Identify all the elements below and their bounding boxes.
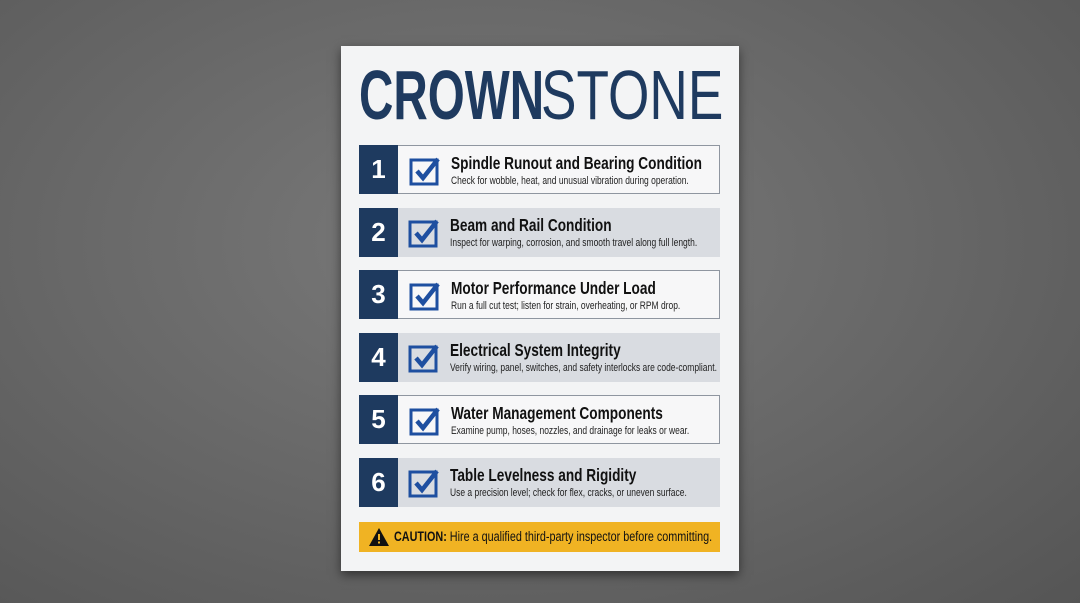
title: CROWN — [359, 56, 544, 134]
title — [359, 56, 723, 134]
caution bar: CAUTION: Hire a qualified third-party inspector before committing. — [394, 529, 712, 544]
item 2 — [359, 208, 720, 257]
item 1: Check for wobble, heat, and unusual vibration during operation. — [451, 175, 689, 187]
item 2: Beam and Rail Condition — [450, 215, 612, 235]
item 2: Inspect for warping, corrosion, and smooth travel along full length. — [450, 237, 697, 249]
title: STONE — [541, 56, 723, 134]
item 6: Table Levelness and Rigidity — [450, 465, 636, 485]
item 1 — [359, 145, 720, 194]
item 5: 5 — [371, 404, 386, 434]
item 4: Electrical System Integrity — [450, 340, 621, 360]
item 3 — [359, 270, 720, 319]
item 2: 2 — [371, 217, 386, 247]
item 3: Run a full cut test; listen for strain, overheating, or RPM drop. — [451, 300, 680, 312]
caution bar — [359, 522, 720, 552]
item 3: Motor Performance Under Load — [451, 278, 656, 298]
item 5: Water Management Components — [451, 403, 663, 423]
item 6: 6 — [371, 467, 386, 497]
item 4: Verify wiring, panel, switches, and safety interlocks are code-compliant. — [450, 362, 717, 374]
item 1: 1 — [371, 154, 386, 184]
item 6 — [359, 458, 720, 507]
item 4: 4 — [371, 342, 386, 372]
item 6: Use a precision level; check for flex, cracks, or uneven surface. — [450, 487, 687, 499]
item 5: Examine pump, hoses, nozzles, and drainage for leaks or wear. — [451, 425, 689, 437]
poster card — [341, 46, 739, 571]
item 1: Spindle Runout and Bearing Condition — [451, 153, 702, 173]
item 5 — [359, 395, 720, 444]
item 3: 3 — [371, 279, 386, 309]
item 4 — [359, 333, 720, 382]
